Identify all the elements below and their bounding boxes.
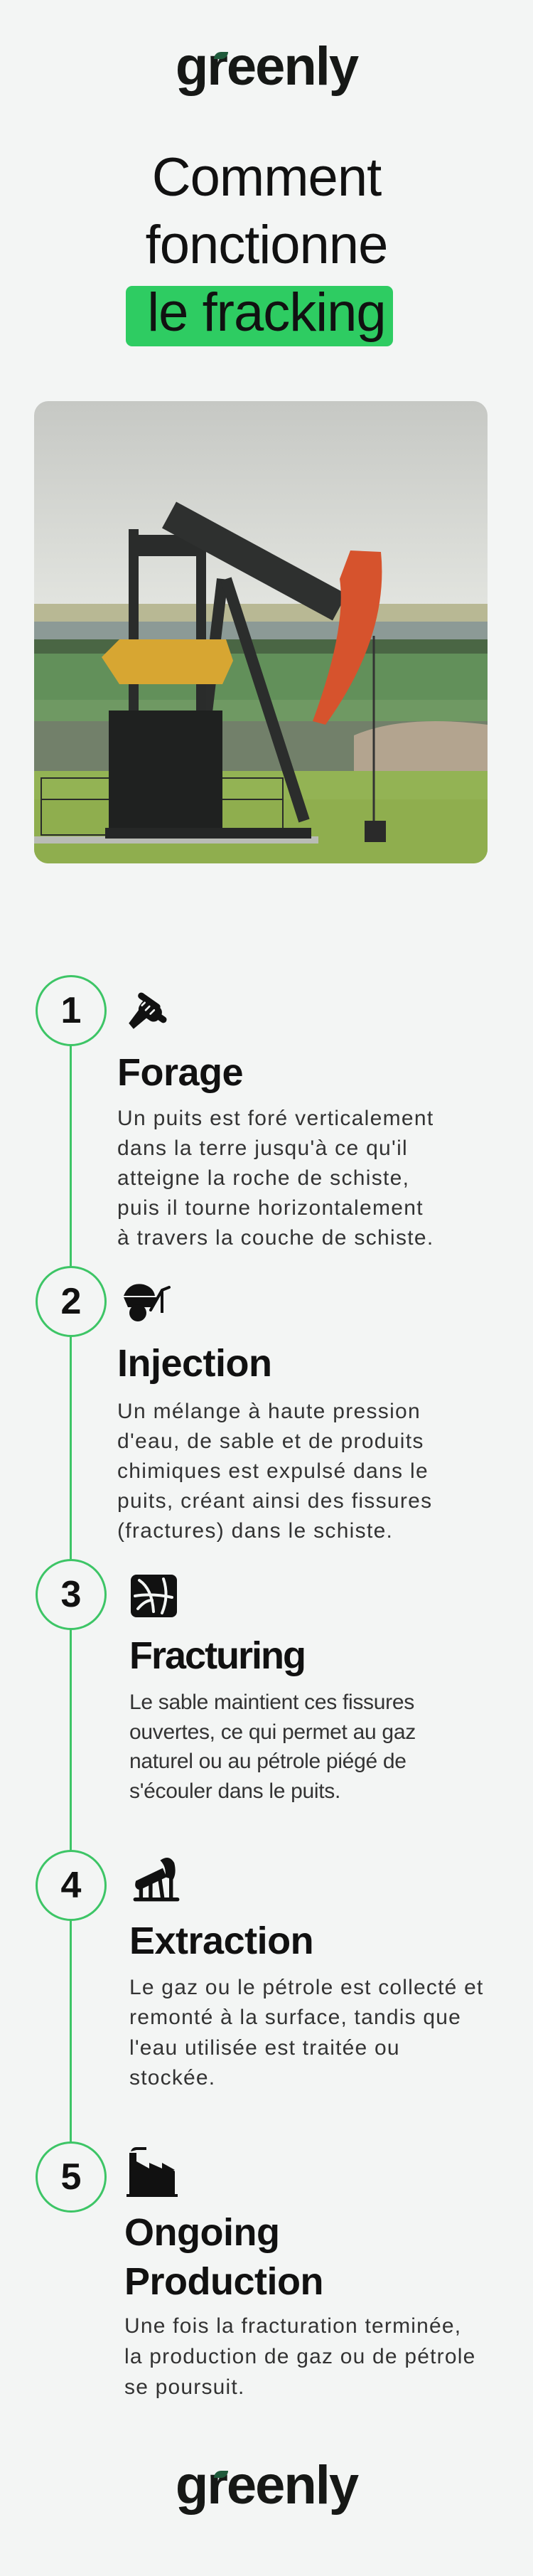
body	[129, 1691, 416, 1803]
body: Le gaz ou le pétrole est collecté et	[129, 1976, 483, 1999]
heading: Forage	[117, 1051, 243, 1094]
number circle 3: 3	[61, 1574, 81, 1615]
body: remonté à la surface, tandis que	[129, 2006, 461, 2029]
body: Une fois la fracturation terminée,	[124, 2314, 461, 2338]
icon: drill	[129, 993, 166, 1029]
step 5: Ongoing Production	[36, 2141, 475, 2399]
photo: oil pumpjack	[34, 401, 488, 863]
icon: fractures	[131, 1575, 177, 1617]
step 4: Extraction	[36, 1850, 483, 2090]
base	[109, 710, 222, 839]
number circle 3	[36, 1559, 107, 1630]
title text: fonctionne	[146, 215, 387, 275]
number circle 1: 1	[61, 990, 81, 1031]
number circle 4	[36, 1850, 107, 1921]
body: s'écouler dans le puits.	[129, 1779, 340, 1803]
body: d'eau, de sable et de produits	[117, 1430, 424, 1453]
timeline line	[70, 1011, 72, 2177]
body: dans la terre jusqu'à ce qu'il	[117, 1137, 408, 1160]
body: l'eau utilisée est traitée ou	[129, 2036, 400, 2060]
heading: Extraction	[129, 1920, 313, 1962]
heading: Injection	[117, 1342, 272, 1385]
icon: wheelbarrow	[124, 1284, 171, 1321]
body: puits, créant ainsi des fissures	[117, 1489, 432, 1513]
step 3: Fracturing	[36, 1559, 416, 1803]
left posts	[129, 529, 206, 721]
step 2: Injection	[36, 1266, 432, 1543]
body: à travers la couche de schiste.	[117, 1226, 434, 1250]
body: ouvertes, ce qui permet au gaz	[129, 1720, 416, 1744]
body: chimiques est expulsé dans le	[117, 1459, 429, 1483]
title text: le fracking	[147, 282, 386, 343]
body: Le sable maintient ces fissures	[129, 1691, 414, 1714]
title text: Comment	[152, 147, 381, 208]
body: naturel ou au pétrole piégé de	[129, 1750, 407, 1773]
number circle 5	[36, 2141, 107, 2213]
number circle 4: 4	[61, 1865, 81, 1906]
number circle 5: 5	[61, 2156, 81, 2198]
highlight box	[126, 286, 393, 346]
icon: pumpjack	[134, 1858, 179, 1902]
horsehead	[313, 550, 382, 725]
body: la production de gaz ou de pétrole	[124, 2345, 475, 2368]
bridle	[372, 636, 375, 842]
A-frame	[194, 579, 304, 821]
body: Un puits est foré verticalement	[117, 1107, 434, 1130]
heading	[124, 2211, 323, 2303]
body: puis il tourne horizontalement	[117, 1196, 424, 1220]
body	[117, 1400, 432, 1543]
heading: Ongoing	[124, 2211, 279, 2254]
body	[124, 2314, 475, 2399]
body: atteigne la roche de schiste,	[117, 1166, 409, 1190]
title text	[146, 147, 387, 343]
body: se poursuit.	[124, 2375, 244, 2399]
heading: Production	[124, 2260, 323, 2303]
beam	[169, 515, 340, 607]
number circle 1	[36, 975, 107, 1046]
step 1: Forage	[36, 975, 434, 1250]
body: Un mélange à haute pression	[117, 1400, 421, 1423]
fence	[41, 778, 283, 835]
logo: greenly header: greenly	[176, 36, 357, 97]
title	[126, 147, 393, 346]
number circle 2	[36, 1266, 107, 1337]
body: (fractures) dans le schiste.	[117, 1519, 393, 1543]
logo: greenly footer: greenly	[176, 2455, 357, 2516]
body	[117, 1107, 434, 1250]
number circle 2: 2	[61, 1281, 81, 1322]
icon: factory	[126, 2147, 178, 2197]
body: stockée.	[129, 2066, 215, 2090]
body	[129, 1976, 483, 2090]
heading: Fracturing	[129, 1634, 305, 1677]
counterweights	[102, 639, 233, 684]
